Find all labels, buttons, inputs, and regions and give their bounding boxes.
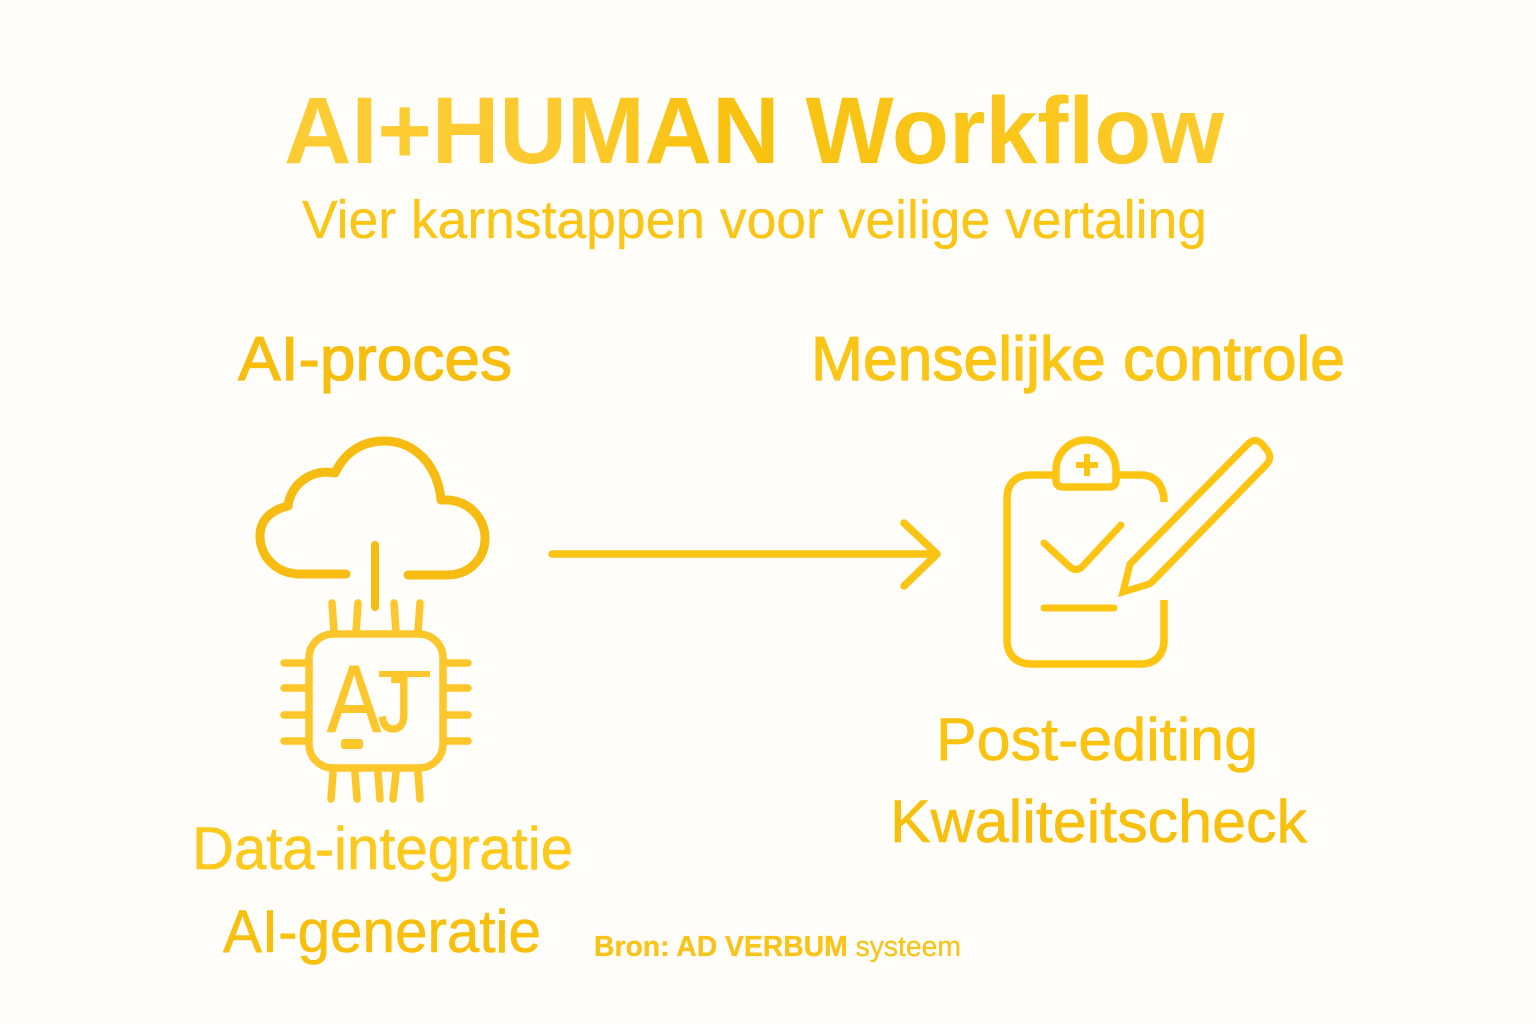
panel: AI-proces (192, 325, 573, 965)
icon: clipboard with pen (1007, 440, 1270, 664)
panel: Menselijke controle (811, 325, 1345, 855)
icon: AI chip: J (378, 659, 412, 748)
heading: AI-proces: AI-proces (238, 325, 512, 394)
label: Kwaliteitscheck: Kwaliteitscheck (890, 788, 1308, 855)
heading: Menselijke controle: Menselijke controle (811, 325, 1345, 394)
icon: AI chip (284, 603, 468, 799)
label: Post-editing: Post-editing (936, 706, 1258, 773)
arrow (552, 523, 937, 586)
label: Data-integratie: Data-integratie (192, 815, 573, 882)
icon: AI chip: A (327, 646, 381, 753)
source note: Bron: AD VERBUM systeem (594, 931, 961, 963)
subtitle: Vier karnstappen voor veilige vertaling (302, 190, 1207, 250)
label: AI-generatie: AI-generatie (223, 898, 541, 965)
icon: cloud (260, 441, 485, 607)
title: AI+HUMAN Workflow (284, 78, 1225, 184)
